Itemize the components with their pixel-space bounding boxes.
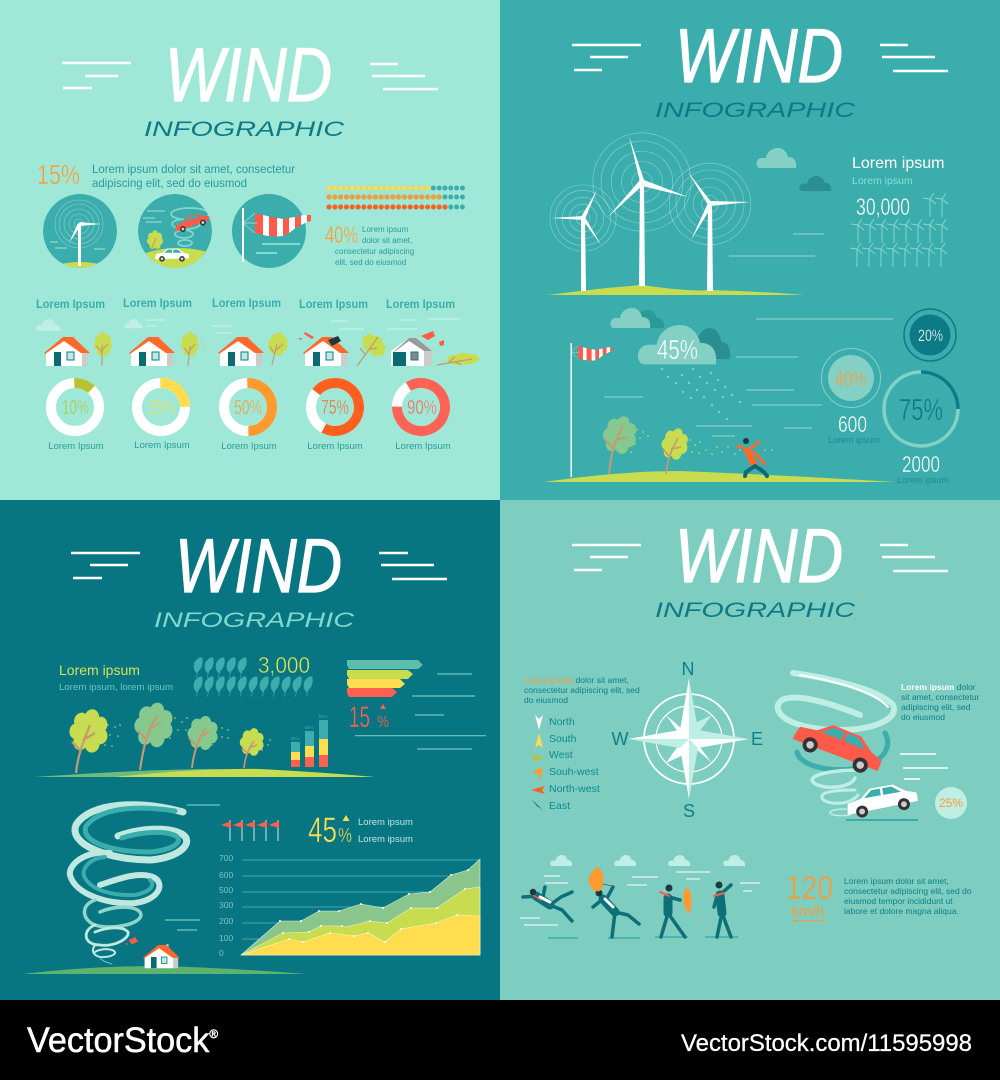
stat: 600: 600	[838, 411, 867, 437]
icon: large tornado	[70, 805, 187, 964]
text block: speed description: eiusmod tempor incididunt ut	[844, 896, 953, 906]
y axis labels: 100	[219, 933, 233, 943]
stat: 120 km/h	[786, 869, 833, 922]
chart: stacked columns	[290, 714, 328, 767]
text block: lorem ipsum twice	[358, 817, 413, 845]
wind lines beside title	[71, 553, 447, 579]
pictogram: leaf rows	[194, 658, 312, 697]
icon: rain cloud with 45 percent	[638, 325, 730, 365]
gauge: 75 percent	[884, 372, 958, 446]
chart: stacked columns: 36%	[290, 736, 300, 741]
icon: tree 3	[185, 713, 221, 768]
panel: background footer	[0, 1000, 1000, 1080]
donut 50 percent	[224, 383, 272, 431]
icon: house 2	[129, 336, 175, 366]
y axis labels: 500	[219, 885, 233, 895]
text block: 40 percent caption: dolor sit amet,	[362, 236, 412, 245]
stat: 2000: 2000	[902, 451, 940, 477]
title: wind: WIND	[175, 524, 342, 609]
pictogram: red flags	[221, 820, 279, 841]
donut values: 50%	[234, 397, 262, 419]
chart: donut rings	[51, 373, 454, 441]
icon: compass rose	[628, 678, 749, 799]
icon: person against wind	[738, 438, 767, 476]
stat: 15 percent up: %	[377, 712, 389, 731]
text block: 40 percent caption: Lorem ipsum	[362, 225, 409, 234]
headings: five columns	[36, 296, 455, 311]
icon: yellow tree	[658, 425, 692, 474]
text block: 40 percent caption: elit, sed do eiusmod	[335, 258, 406, 267]
gauge: 75 percent: 75%	[899, 392, 943, 427]
icon: tree 1	[66, 705, 112, 773]
text block: compass intro	[524, 675, 640, 705]
watermark: brand: VectorStock	[27, 1021, 214, 1060]
text block: tornado note: adipiscing elit, sed	[901, 702, 971, 712]
rain drops	[662, 369, 740, 419]
heading: lorem ipsum: Lorem ipsum	[852, 155, 944, 172]
icon: rain cloud with 45 percent: 45%	[657, 334, 698, 365]
wind lines beside title	[572, 45, 948, 71]
chart: dot progress rows	[329, 188, 468, 207]
headings: five columns: Lorem Ipsum	[299, 297, 368, 311]
stat: 120 km/h: 120	[786, 869, 833, 906]
icon: tree 1	[94, 332, 112, 366]
headings: five columns: Lorem Ipsum	[123, 296, 192, 310]
title: wind: WIND	[675, 514, 843, 599]
headings: five columns: Lorem Ipsum	[386, 297, 455, 311]
legend: wind directions: North	[549, 716, 575, 728]
headings: five columns: Lorem Ipsum	[36, 297, 105, 311]
wind lines near people	[520, 872, 760, 925]
donut captions: Lorem Ipsum	[307, 441, 363, 452]
clouds and wind lines above houses	[36, 319, 460, 333]
icon: fallen tree	[437, 352, 480, 366]
compass letters: S	[683, 801, 695, 821]
donut values: 25%	[148, 397, 175, 419]
panel: wind turbines infographic	[500, 0, 1000, 500]
subheading: Lorem ipsum, lorem ipsum	[59, 682, 173, 693]
chart: stacked arrow bars	[347, 660, 423, 697]
subtitle: infographic: INFOGRAPHIC	[655, 599, 856, 622]
donut captions: Lorem Ipsum	[48, 441, 104, 452]
icon: man standing	[714, 882, 731, 937]
text block: lorem ipsum twice: Lorem ipsum	[358, 834, 413, 845]
donut 75 percent	[301, 373, 369, 441]
stat: 15 percent up: 15	[349, 701, 370, 734]
compass letters	[612, 659, 763, 821]
icon: small windsock	[571, 346, 613, 361]
donut captions: Lorem Ipsum	[134, 440, 190, 451]
text block: tornado note: do eiusmod	[901, 712, 945, 722]
subtitle: infographic: INFOGRAPHIC	[655, 99, 856, 122]
legend: wind directions: Souh-west	[549, 766, 599, 778]
compass letters: E	[751, 729, 763, 749]
subtitle: infographic: INFOGRAPHIC	[144, 118, 345, 141]
chart: stacked columns: 55%	[318, 714, 328, 719]
chart: area chart	[219, 853, 480, 958]
stat: 45 percent: 45	[308, 811, 337, 850]
y axis labels: 600	[219, 870, 233, 880]
text block: tornado note: Lorem ipsum dolor	[901, 682, 976, 692]
icon: tree 4	[238, 726, 267, 768]
badge: 25 percent	[935, 787, 967, 819]
legend: wind directions: South	[549, 733, 577, 745]
pictogram: mini turbines	[850, 193, 948, 267]
sound rings around turbines	[550, 133, 751, 251]
panel: trees and tornado infographic	[0, 500, 500, 1000]
legend: wind directions: North-west	[549, 783, 600, 795]
windsock pole	[570, 343, 572, 477]
y axis labels: 0	[219, 948, 224, 958]
legend: wind directions: West	[549, 749, 573, 761]
icon: small cloud	[610, 308, 664, 328]
watermark: brand: ®	[209, 1027, 218, 1041]
y axis labels: 300	[219, 900, 233, 910]
icon: light cloud	[756, 148, 796, 168]
text block: compass intro: do eiusmod	[524, 695, 568, 705]
text block: 40 percent caption	[335, 225, 414, 267]
gauge: 20 percent: 20%	[918, 326, 943, 345]
icon: man holding umbrella	[660, 884, 691, 937]
donut 90 percent	[388, 374, 454, 440]
icon: dark cloud	[799, 176, 831, 191]
icon: wind turbine small	[551, 190, 601, 291]
legend: wind directions	[531, 715, 600, 812]
icon: man with umbrella blown	[589, 867, 639, 937]
subheading: Lorem ipsum	[852, 175, 913, 187]
icon: tree 2	[131, 699, 178, 770]
shadow under white car	[846, 819, 918, 821]
text block: tornado note: sit amet, consectetur	[901, 692, 980, 702]
icon: tree 3	[266, 330, 290, 365]
stat: 120 km/h: km/h	[792, 903, 824, 920]
y axis labels	[219, 853, 233, 958]
wind lines	[165, 674, 486, 930]
data points	[280, 870, 468, 942]
text block: speed description: consectetur adipiscing elit, sed do	[844, 886, 972, 896]
icon: tree 2	[181, 332, 206, 366]
stat: 40 percent: 40%	[325, 222, 358, 249]
icon: green tree	[599, 412, 641, 474]
gauge: 40 percent: 40%	[835, 368, 866, 391]
series: bottom area	[241, 915, 480, 955]
donut captions: Lorem Ipsum	[221, 441, 277, 452]
stat: 30,000: 30,000	[856, 194, 910, 221]
text block: intro	[92, 162, 295, 190]
donut values	[62, 397, 437, 419]
icon: tornado and cars circle	[138, 194, 212, 268]
icon: tornado with cars	[778, 673, 919, 821]
stat: 15 percent: 15%	[37, 159, 80, 190]
heading: lorem ipsum: Lorem ipsum	[59, 662, 140, 678]
donut values: 90%	[407, 397, 437, 419]
white wind lines	[900, 754, 948, 779]
wind lines beside title	[572, 545, 948, 571]
donut values: 75%	[321, 397, 349, 419]
text block: tornado note	[901, 682, 980, 722]
headings: five columns: Lorem Ipsum	[212, 296, 281, 310]
gauge: 20 percent	[904, 309, 956, 361]
blowing leaves	[631, 430, 772, 454]
icon: falling man	[523, 887, 572, 921]
badge: 25 percent: 25%	[939, 796, 963, 810]
y axis labels: 700	[219, 853, 233, 863]
text block: 40 percent caption: consectetur adipiscing	[335, 247, 414, 256]
text block: intro: Lorem ipsum dolor sit amet, consectetur	[92, 162, 295, 176]
text block: speed description	[844, 876, 972, 916]
ground: storm hill	[544, 471, 895, 482]
donut 10 percent	[51, 383, 99, 431]
icon: small house	[125, 937, 180, 968]
title: wind: WIND	[675, 14, 843, 99]
ground shadows	[548, 937, 738, 938]
series: top area	[241, 859, 480, 955]
icon: wind turbine medium	[688, 172, 750, 291]
compass letters: W	[612, 729, 628, 749]
subtitle: infographic: INFOGRAPHIC	[154, 609, 355, 632]
donut captions	[48, 440, 451, 452]
legend: wind directions: East	[549, 800, 570, 812]
icon: turbine circle	[43, 194, 117, 268]
chart: stacked columns: 45%	[304, 725, 314, 730]
blowing leaves	[105, 718, 270, 750]
text block: intro: adipiscing elit, sed do eiusmod	[92, 176, 247, 190]
icon: tree 4 bent	[357, 329, 391, 366]
stat: 3,000: 3,000	[258, 652, 310, 678]
stat: 45 percent: %	[338, 825, 352, 847]
text block: compass intro: consectetur adipiscing elit, sed	[524, 685, 640, 695]
icon: house 5 without roof	[390, 331, 444, 366]
icon: windsock circle	[232, 194, 311, 268]
icon: house 1	[44, 336, 90, 366]
icon: wind turbine large	[608, 136, 688, 286]
series: middle area	[241, 887, 480, 955]
panel: houses and rings infographic	[0, 0, 500, 500]
text block: speed description: Lorem ipsum dolor sit amet,	[844, 876, 949, 886]
wind lines	[604, 234, 893, 436]
caption: 2000: Lorem ipsum	[897, 475, 949, 485]
wind lines beside title	[62, 63, 438, 89]
icon: house 4 with damaged roof	[298, 332, 349, 366]
donut values: 10%	[62, 397, 89, 419]
panel: compass and people infographic	[500, 500, 1000, 1000]
text block: lorem ipsum twice: Lorem ipsum	[358, 817, 413, 828]
red car	[790, 713, 887, 779]
icon: house 3	[218, 336, 264, 366]
text block: compass intro: Lorem ipsum dolor sit amet,	[524, 675, 629, 685]
title: wind: WIND	[165, 33, 332, 118]
watermark: url: VectorStock.com/11595998	[681, 1030, 972, 1057]
gauge: 40 percent	[822, 348, 880, 408]
text block: speed description: labore et dolore magna aliqua.	[844, 906, 959, 916]
compass letters: N	[682, 659, 694, 679]
donut captions: Lorem Ipsum	[395, 441, 451, 452]
white car	[844, 781, 919, 820]
caption: 600: Lorem ipsum	[828, 435, 880, 445]
ground: tornado hill	[22, 966, 307, 974]
donut 25 percent	[137, 383, 185, 431]
ground: tree hill	[34, 769, 375, 777]
ground: turbine hill	[548, 285, 804, 295]
y axis labels: 200	[219, 916, 233, 926]
clouds over people	[550, 855, 745, 866]
